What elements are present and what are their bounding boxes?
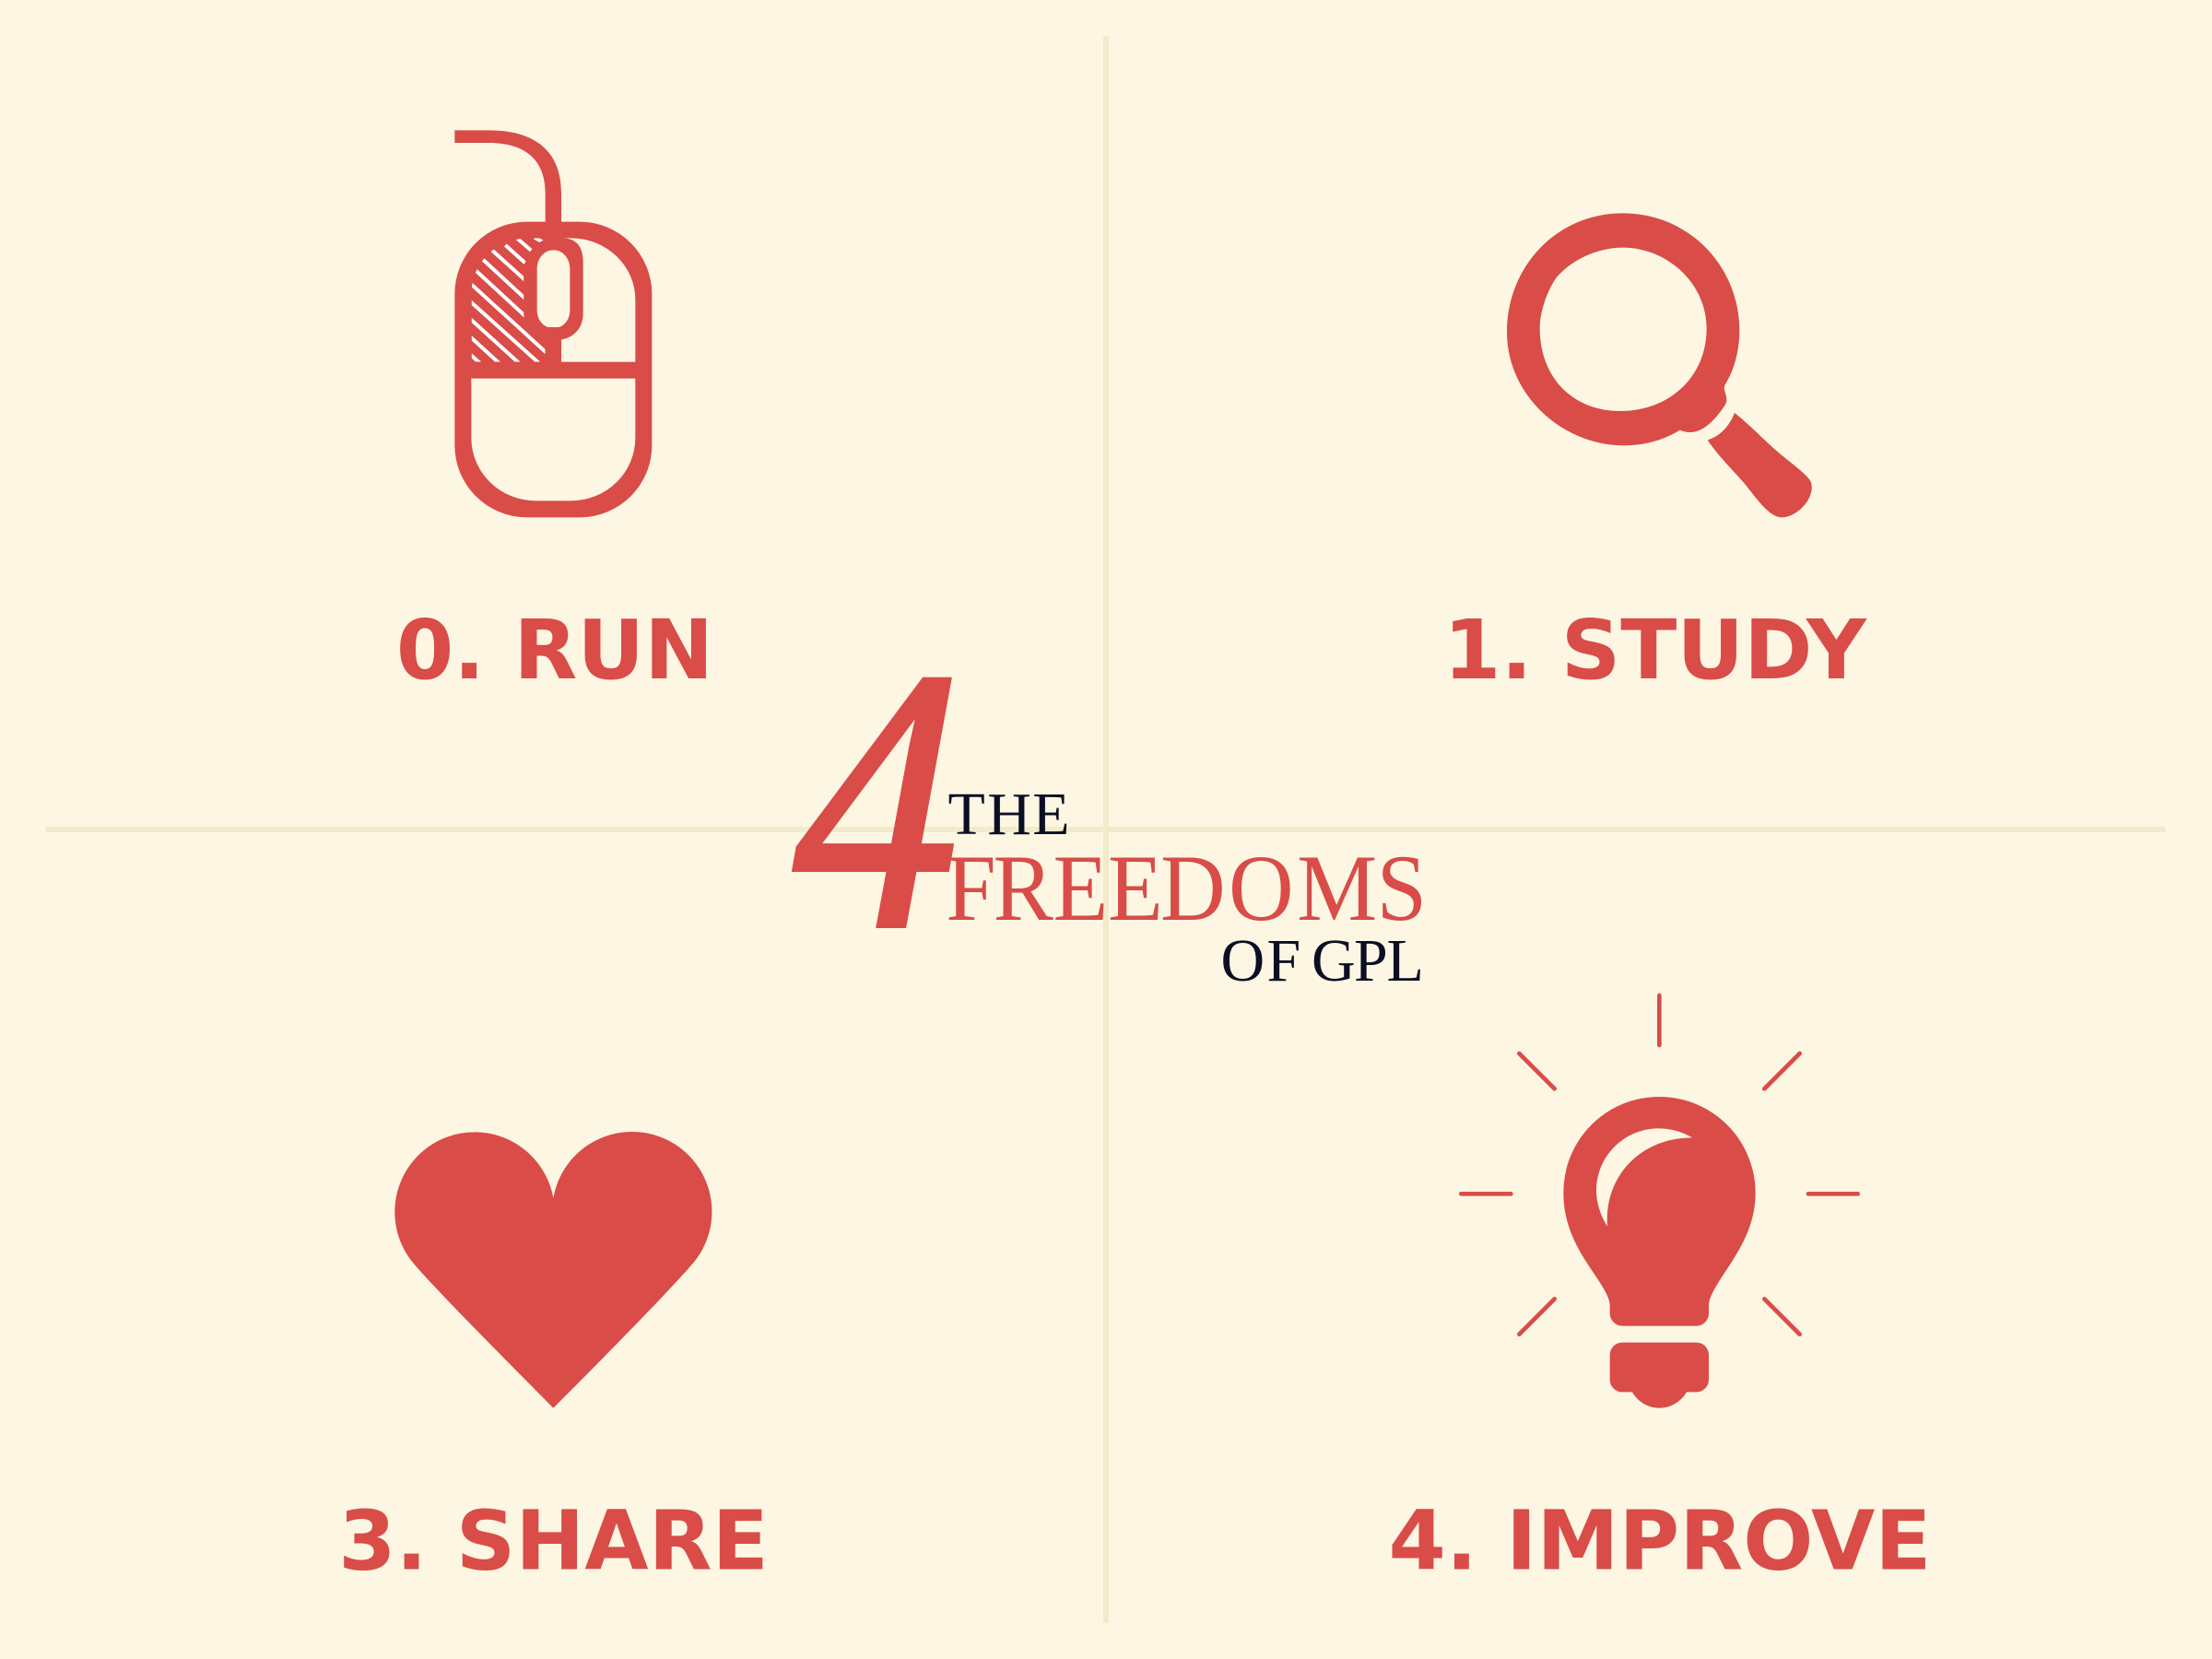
- icon: heart: [394, 1132, 712, 1408]
- label: 4. IMPROVE: 4. IMPROVE: [1388, 1493, 1932, 1589]
- label: 0. RUN: 0. RUN: [396, 603, 713, 699]
- title: FREEDOMS: FREEDOMS: [946, 835, 1427, 941]
- label: 1. STUDY: 1. STUDY: [1443, 603, 1867, 699]
- icon: magnifying glass: [1507, 213, 1812, 517]
- title: THE: THE: [947, 781, 1070, 848]
- icon: light bulb: [1461, 995, 1858, 1408]
- label: 3. SHARE: 3. SHARE: [338, 1493, 769, 1589]
- title: numeral 4: 4: [790, 593, 966, 1006]
- icon: computer mouse: [454, 130, 652, 517]
- title: OF GPL: OF GPL: [1220, 927, 1424, 994]
